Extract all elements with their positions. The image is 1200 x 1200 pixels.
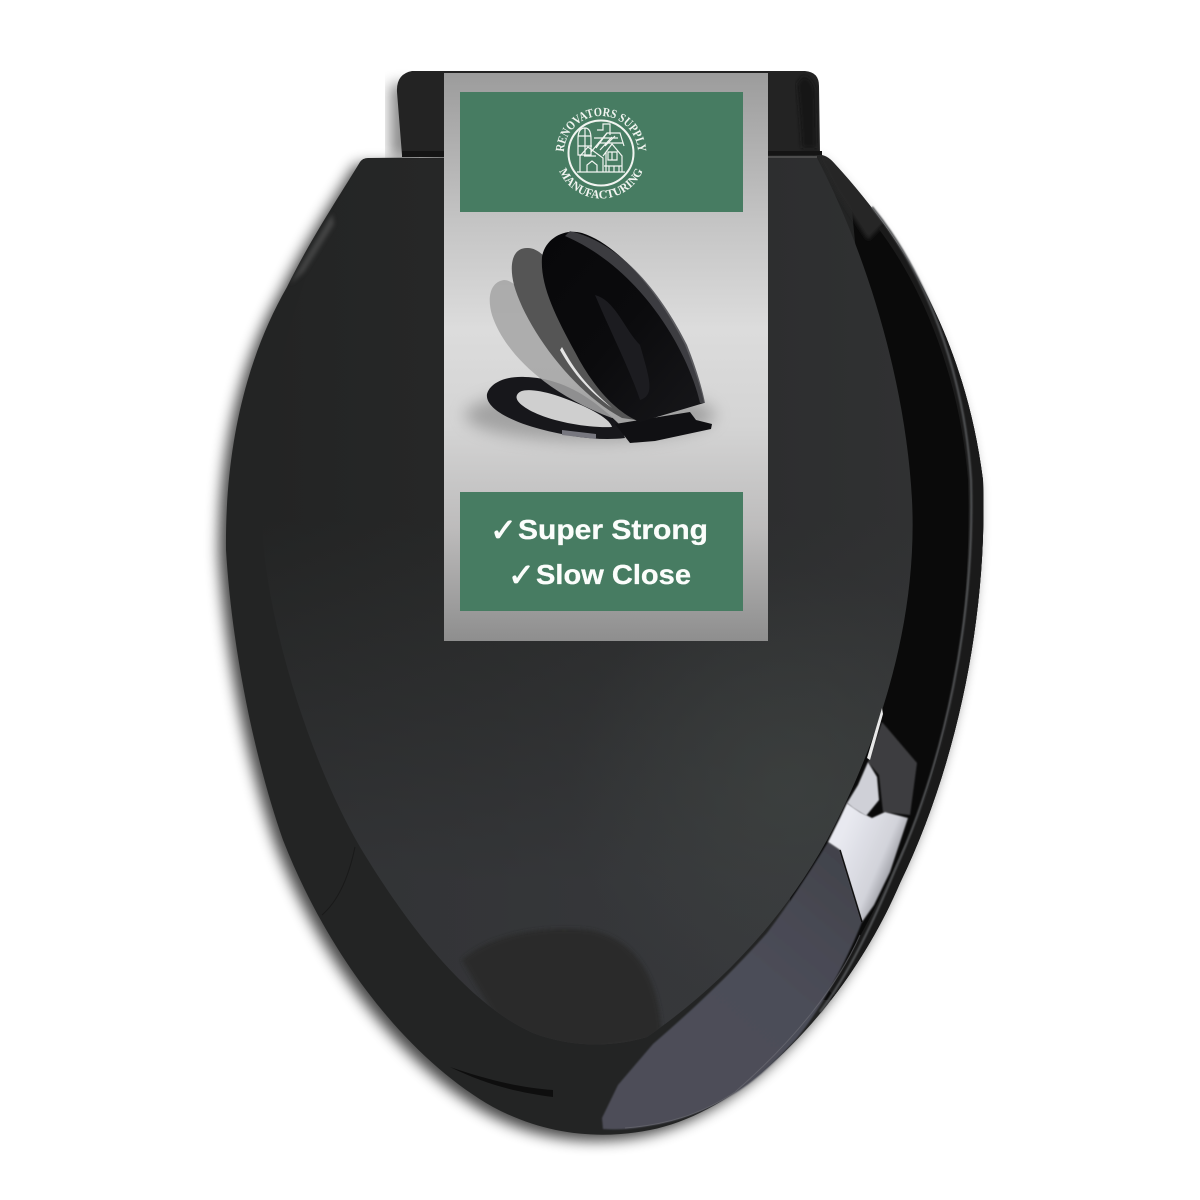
dark slit on lower edge — [450, 1067, 553, 1097]
main black lid — [542, 232, 704, 422]
feature: Slow Close: ✓ — [508, 556, 535, 594]
toilet seat — [226, 152, 1010, 1135]
features panel — [460, 492, 743, 611]
logo panel — [460, 92, 743, 212]
grey reflection patch — [868, 722, 917, 815]
feature: Slow Close — [508, 556, 691, 594]
black edge of reflection — [840, 850, 862, 922]
hinge block — [397, 71, 822, 157]
purple-grey reflection band — [602, 842, 862, 1129]
hinge plate — [615, 412, 712, 443]
grey rim highlight line — [820, 207, 971, 1012]
drop shadow of the seat — [219, 161, 976, 1141]
glossy black right band — [790, 155, 984, 1000]
white reflection lower — [828, 803, 908, 922]
reflected dark spot on lid — [464, 929, 661, 1044]
seat ring — [487, 377, 625, 439]
lid reflections — [595, 295, 649, 400]
ghost lid highlight — [560, 347, 612, 408]
hinge shadow — [390, 84, 414, 158]
ghost lid mid — [512, 248, 636, 420]
white streak — [867, 708, 883, 760]
feature: Super Strong: Super Strong — [518, 514, 708, 545]
product infographic — [208, 71, 988, 1152]
white reflection upper — [847, 762, 879, 816]
lid top edge line — [768, 156, 817, 158]
logo text top: RENOVATORS SUPPLY — [556, 108, 646, 152]
product card — [444, 73, 768, 641]
thin band outline — [625, 935, 860, 1128]
logo: Renovators Supply Manufacturing — [556, 108, 646, 199]
logo house icon — [577, 124, 625, 172]
feature: Super Strong: ✓ — [490, 511, 517, 549]
floor shadow — [465, 389, 715, 441]
slow close seat illustration — [465, 231, 715, 443]
feature: Slow Close: Slow Close — [536, 559, 691, 590]
seat lid surface — [261, 158, 913, 1044]
lid edge sheen — [565, 231, 705, 403]
logo text bottom: MANUFACTURING — [559, 167, 642, 199]
bevel seam — [322, 847, 355, 915]
feature: Super Strong — [490, 511, 708, 549]
upper left sheen — [290, 214, 334, 284]
ghost lid light — [490, 280, 622, 418]
seat outer rim — [226, 155, 983, 1135]
